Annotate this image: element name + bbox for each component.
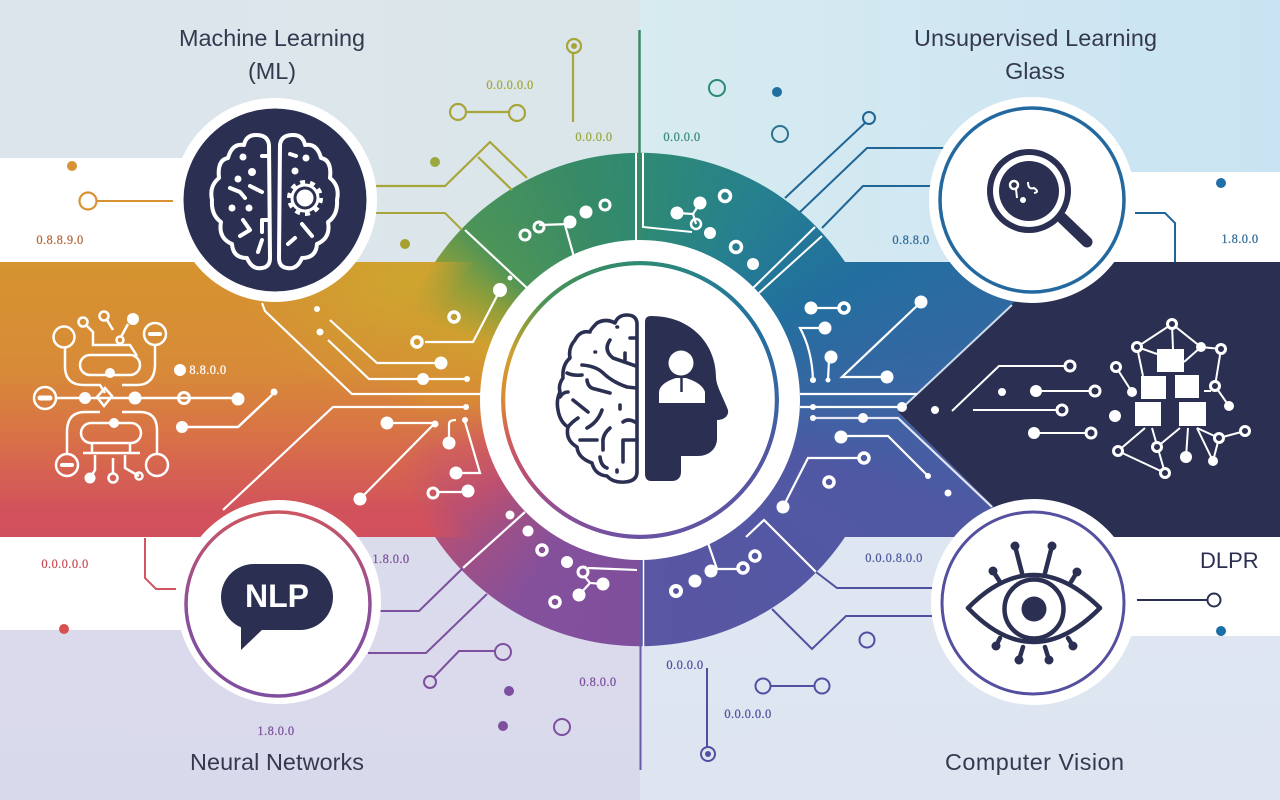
indigo traces: bottom right	[701, 572, 932, 761]
white cluster: lower right disc	[671, 520, 816, 596]
white traces: right of centre	[776, 296, 992, 514]
small numeric labels: 8.8.0.0	[189, 363, 227, 377]
small numeric labels: 0.0.0.0.0	[724, 707, 772, 721]
circle: NLP	[177, 500, 381, 704]
heading: unsupervised learning: Glass	[1005, 58, 1065, 84]
small numeric labels: 0.8.0.0	[579, 675, 617, 689]
small numeric labels: 0.0.0.0	[575, 130, 613, 144]
white traces: top right disc	[753, 227, 822, 293]
circle: machine learning	[173, 98, 377, 302]
small numeric labels: 1.8.0.0	[1221, 232, 1259, 246]
icon: NLP speech bubble	[221, 564, 333, 650]
small numeric labels	[36, 78, 1259, 738]
label: DLPR: DLPR	[1200, 548, 1259, 573]
icon: central brain half	[557, 315, 637, 482]
heading: computer vision: Computer Vision	[945, 749, 1124, 775]
central white circle	[480, 240, 800, 560]
purple traces: bottom left	[368, 568, 570, 735]
small numeric labels: 1.8.0.0	[257, 724, 295, 738]
small numeric labels: 0.0.0.0.0	[41, 557, 89, 571]
small numeric labels: 0.0.0.0	[663, 130, 701, 144]
circle: unsupervised learning	[929, 97, 1135, 303]
red connector: bottom left band	[59, 538, 176, 634]
heading: machine learning: (ML)	[248, 58, 296, 84]
icon: magnifying glass	[987, 149, 1087, 242]
dark connector: bottom right band	[1136, 594, 1226, 636]
blue traces: top right	[709, 80, 945, 228]
icon: central head with person	[645, 316, 728, 481]
white band: top right	[1080, 172, 1280, 262]
traces in navy panel	[952, 361, 1100, 439]
heading: machine learning	[179, 25, 365, 84]
small numeric labels: 0.8.8.9.0	[36, 233, 84, 247]
white band: bottom right	[1080, 537, 1280, 636]
blue connector: top right band	[1135, 178, 1226, 262]
colour band: left gradient overlay	[312, 262, 474, 537]
colour disc: conic gradient	[418, 152, 1014, 646]
icon: left circuit board	[34, 312, 278, 484]
white trace cluster: upper right disc	[670, 190, 759, 270]
small numeric labels: 0.0.0.0	[666, 658, 704, 672]
background: left half	[0, 0, 640, 800]
heading: unsupervised learning	[914, 25, 1157, 84]
small numeric labels: 1.8.0.0	[372, 552, 410, 566]
white trace cluster: upper left disc	[465, 200, 610, 288]
heading: neural networks: Neural Networks	[190, 749, 364, 775]
circle: computer vision	[931, 499, 1137, 705]
navy panel: right	[898, 262, 1280, 537]
white traces: left of centre	[223, 276, 512, 510]
orange connector: top left band	[67, 161, 174, 210]
small numeric labels: 0.0.0.0.0	[486, 78, 534, 92]
white band: bottom left	[0, 537, 260, 630]
vertical divider: bottom	[640, 557, 644, 770]
white cluster: lower left disc	[463, 510, 637, 607]
icon: NLP speech bubble: NLP	[245, 578, 309, 614]
icon: eye	[968, 542, 1100, 664]
central gradient ring	[501, 261, 779, 539]
heading: unsupervised learning: Unsupervised Learning	[914, 25, 1157, 51]
colour band: base	[0, 262, 460, 537]
small numeric labels: 0.0.0.8.0.0	[865, 551, 923, 565]
small numeric labels: 0.8.8.0	[892, 233, 930, 247]
heading: machine learning: Machine Learning	[179, 25, 365, 51]
icon: brain with gear	[211, 135, 338, 268]
white band: top left	[0, 158, 260, 262]
olive traces: top left	[375, 39, 581, 249]
background: right half	[640, 0, 1280, 800]
vertical divider: top	[636, 30, 692, 243]
icon: network of blocks	[1109, 320, 1250, 478]
